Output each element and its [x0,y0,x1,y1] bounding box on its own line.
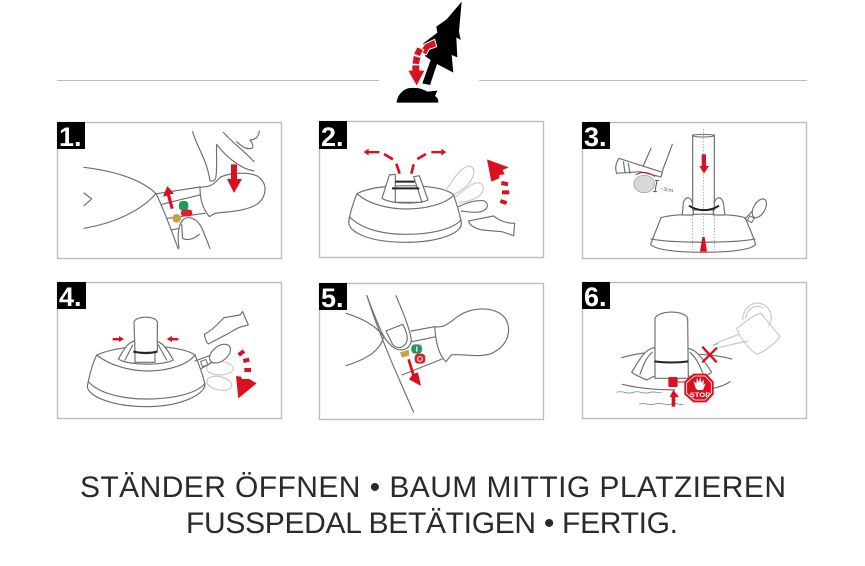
icon: tree falling into stand [397,2,462,103]
step number 3: 3. [584,122,607,152]
illustration: water level warning [617,303,780,407]
illustration: pedal unlock [84,131,265,249]
illustration: trunk inserted [616,129,769,252]
step number 1: 1. [59,122,82,152]
step number 4: 4. [59,282,82,312]
panel 3 [582,122,806,258]
illustration: water level warning: STOP [690,392,711,399]
panel 2 [319,121,544,258]
step number 5: 5. [321,283,344,313]
header rule left [57,80,379,82]
caption text [80,471,786,540]
panel 6 [582,282,806,418]
panel 4 [57,282,282,418]
caption line 1: STÄNDER ÖFFNEN • BAUM MITTIG PLATZIEREN [80,471,786,504]
illustration: stand opened [349,149,515,242]
caption line 2: FUSSPEDAL BETÄTIGEN • FERTIG. [186,507,678,540]
step number 2: 2. [321,122,344,152]
illustration: pedal down [87,312,257,407]
step number 6: 6. [584,282,607,312]
panel 5 [319,283,544,420]
panel 1 [57,122,282,258]
illustration: pedal lock [346,296,509,412]
illustration: trunk inserted: ~3cm [660,186,674,194]
header rule right [479,80,807,82]
